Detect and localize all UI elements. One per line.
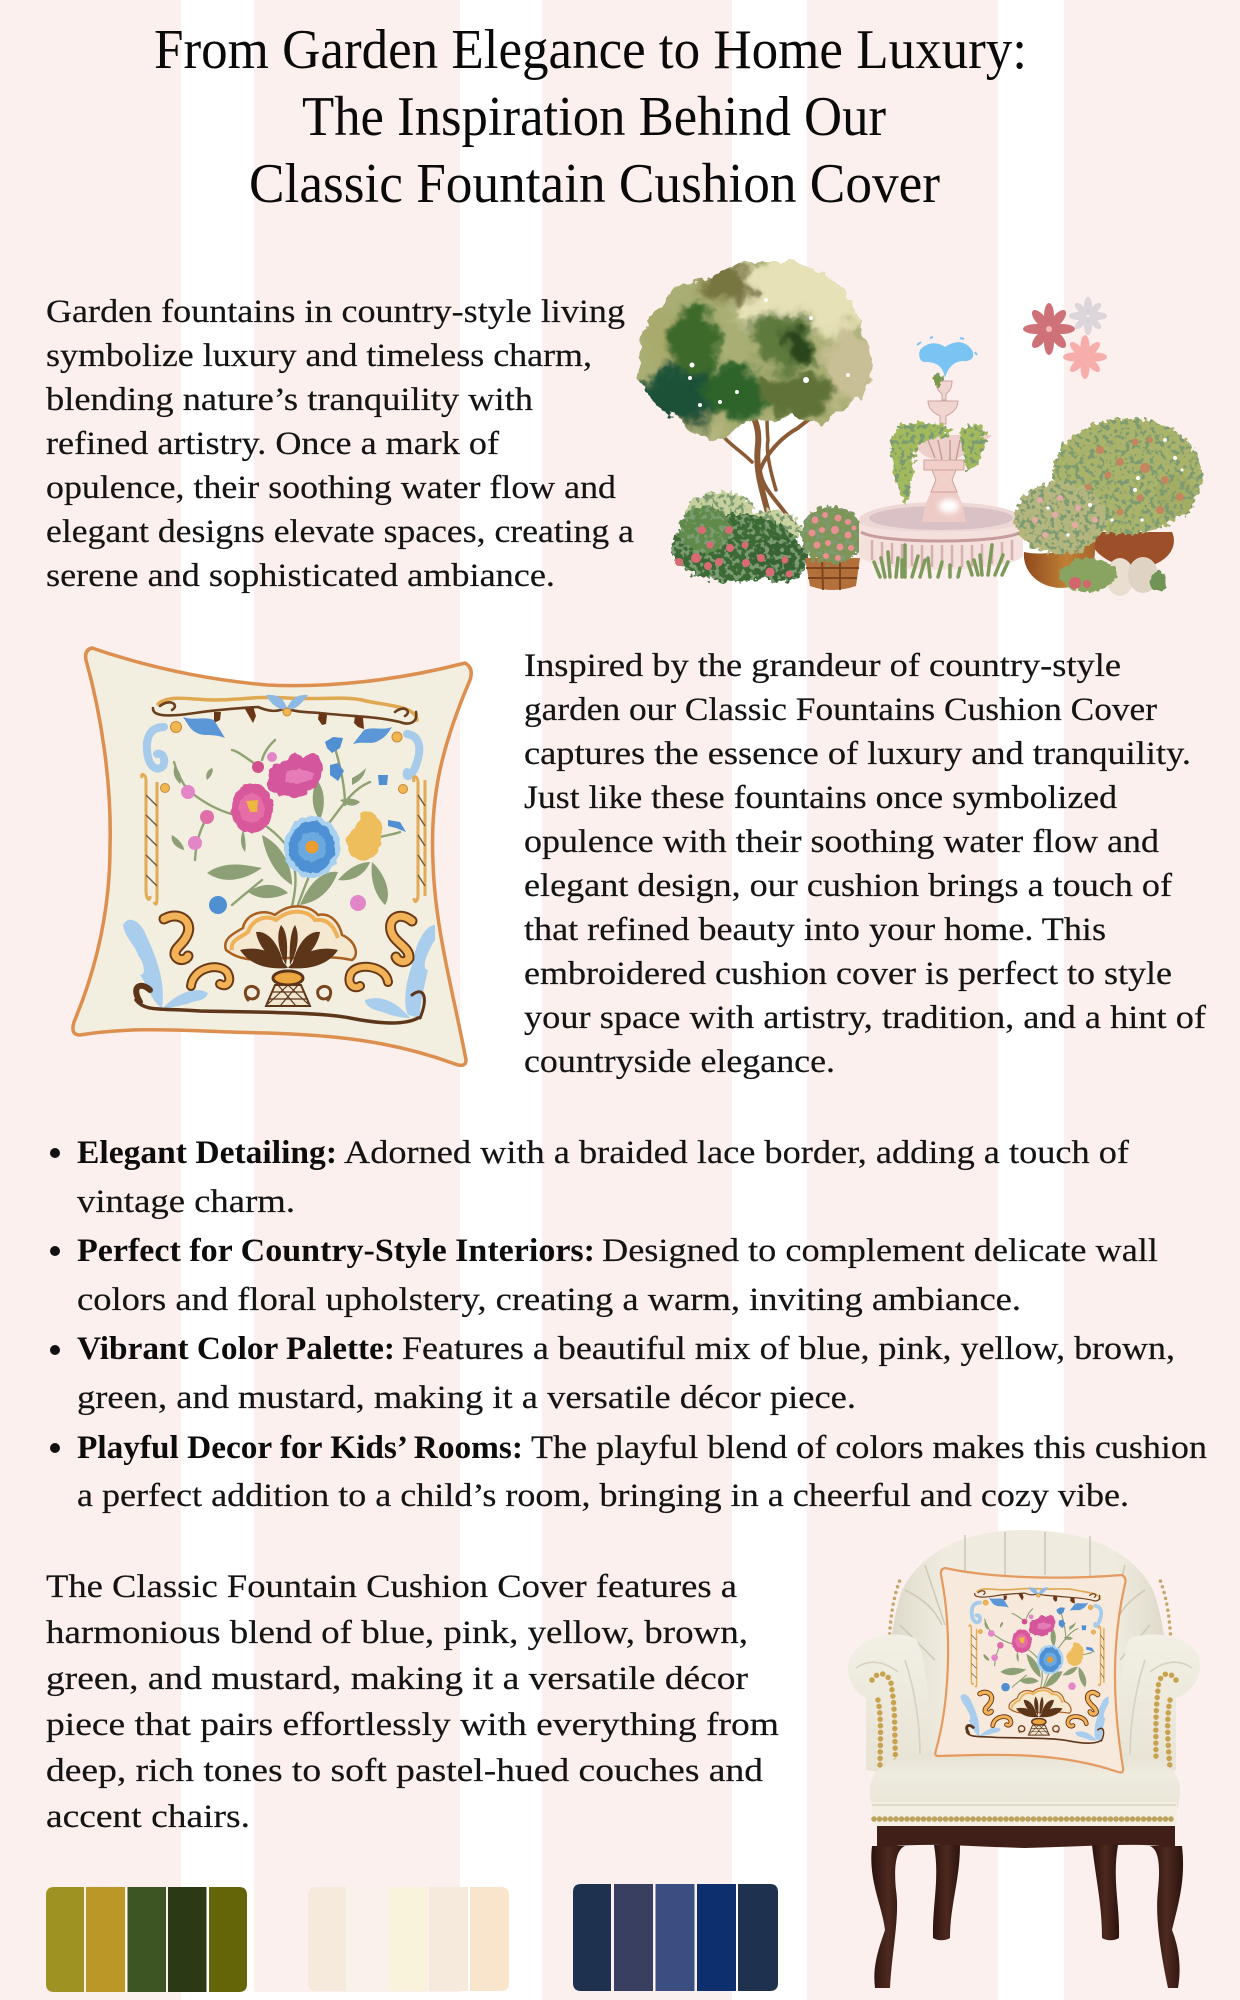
right arm xyxy=(1118,1634,1200,1772)
left flowering bush xyxy=(671,492,808,582)
closing paragraph: harmonious blend of blue, pink, yellow, brown, xyxy=(46,1615,748,1651)
product description paragraph: Just like these fountains once symbolized xyxy=(524,780,1118,816)
product description paragraph: embroidered cushion cover is perfect to style xyxy=(524,956,1172,992)
small cushion xyxy=(935,1568,1126,1772)
pedestal xyxy=(922,490,966,522)
wood rail xyxy=(877,1824,1175,1848)
intro paragraph xyxy=(46,294,634,594)
back legs xyxy=(933,1845,1119,1940)
nail trim along back xyxy=(889,1580,1171,1670)
intro paragraph: blending nature’s tranquility with xyxy=(46,382,534,418)
middle bowl xyxy=(897,435,992,460)
title xyxy=(154,19,1027,215)
decorative small flowers xyxy=(1023,297,1107,379)
title: The Inspiration Behind Our xyxy=(302,86,886,148)
product description paragraph: elegant design, our cushion brings a touch of xyxy=(524,868,1172,904)
photo: cream chair with cushion xyxy=(848,1530,1200,1988)
seat xyxy=(870,1748,1180,1808)
intro paragraph: Garden fountains in country-style living xyxy=(46,294,625,330)
column xyxy=(931,470,957,492)
seat band with nails xyxy=(871,1802,1177,1826)
colour palette: creams xyxy=(308,1887,509,1991)
bullet: vibrant color palette: Features a beautiful mix of blue, pink, yellow, brown, xyxy=(402,1331,1175,1367)
arm shading xyxy=(856,1660,1192,1755)
bullet: elegant detailing: Adorned with a braided lace border, adding a touch of xyxy=(344,1135,1129,1171)
left arm xyxy=(848,1634,932,1772)
title: From Garden Elegance to Home Luxury: xyxy=(154,19,1027,81)
bullet: elegant detailing: Elegant Detailing: xyxy=(77,1135,337,1171)
bullet: kids rooms: a perfect addition to a child’s room, bringing in a cheerful and cozy vibe. xyxy=(77,1478,1129,1514)
bullet: elegant detailing: vintage charm. xyxy=(77,1184,295,1220)
closing paragraph: The Classic Fountain Cushion Cover features a xyxy=(46,1569,737,1605)
feature bullet list xyxy=(50,1135,1207,1514)
title: Classic Fountain Cushion Cover xyxy=(249,153,940,215)
tree highlights xyxy=(688,298,850,407)
product description paragraph: countryside elegance. xyxy=(524,1044,835,1080)
tufting lines xyxy=(900,1532,1150,1660)
colour palette: olive greens xyxy=(46,1887,247,1992)
product description paragraph: Inspired by the grandeur of country-style xyxy=(524,648,1121,684)
grass tufts xyxy=(874,545,1008,577)
bullet: kids rooms: The playful blend of colors makes this cushion xyxy=(531,1430,1207,1466)
right shrubs and pots xyxy=(1014,418,1202,596)
product description paragraph xyxy=(524,648,1206,1080)
bullet: kids rooms: Playful Decor for Kids’ Rooms: xyxy=(77,1430,523,1466)
intro paragraph: refined artistry. Once a mark of xyxy=(46,426,499,462)
tree canopy xyxy=(636,259,873,442)
product description paragraph: that refined beauty into your home. This xyxy=(524,912,1106,948)
chair back xyxy=(886,1530,1172,1770)
closing paragraph xyxy=(46,1569,779,1835)
colour palette: navy blues xyxy=(573,1884,778,1991)
fountain xyxy=(859,337,1023,577)
intro paragraph: serene and sophisticated ambiance. xyxy=(46,558,555,594)
closing paragraph: accent chairs. xyxy=(46,1799,250,1835)
top cup xyxy=(936,381,952,400)
product description paragraph: your space with artistry, tradition, and a hint of xyxy=(524,1000,1206,1036)
ivy xyxy=(891,374,985,505)
bullet: vibrant color palette: green, and mustard, making it a versatile décor piece. xyxy=(77,1380,856,1416)
intro paragraph: opulence, their soothing water flow and xyxy=(46,470,617,506)
bullet: elegant detailing xyxy=(50,1135,1129,1220)
bullet: country-style interiors: Perfect for Country-Style Interiors: xyxy=(77,1233,595,1269)
closing paragraph: green, and mustard, making it a versatile décor xyxy=(46,1661,748,1697)
product description paragraph: opulence with their soothing water flow and xyxy=(524,824,1160,860)
intro paragraph: symbolize luxury and timeless charm, xyxy=(46,338,592,374)
potted flowers in basket xyxy=(800,506,864,590)
bullet: kids rooms xyxy=(50,1430,1207,1514)
bullet: country-style interiors: Designed to complement delicate wall xyxy=(602,1233,1158,1269)
illustration: watercolor garden fountain xyxy=(620,250,1202,596)
upper bowl xyxy=(928,401,958,424)
bullet: vibrant color palette xyxy=(50,1331,1175,1416)
bullet: country-style interiors xyxy=(50,1233,1158,1318)
tree trunks xyxy=(722,400,822,528)
arm nailheads xyxy=(872,1674,1176,1768)
water spray xyxy=(919,342,973,378)
photo: embroidered cushion xyxy=(73,648,471,1065)
product description paragraph: captures the essence of luxury and tranquility. xyxy=(524,736,1191,772)
product description paragraph: garden our Classic Fountains Cushion Cover xyxy=(524,692,1157,728)
closing paragraph: piece that pairs effortlessly with everything from xyxy=(46,1707,779,1743)
basin xyxy=(859,502,1023,538)
bullet: vibrant color palette: Vibrant Color Palette: xyxy=(77,1331,395,1367)
front legs xyxy=(871,1846,1183,1988)
bullet: country-style interiors: colors and floral upholstery, creating a warm, inviting ambiance. xyxy=(77,1282,1021,1318)
closing paragraph: deep, rich tones to soft pastel-hued couches and xyxy=(46,1753,764,1789)
intro paragraph: elegant designs elevate spaces, creating a xyxy=(46,514,634,550)
